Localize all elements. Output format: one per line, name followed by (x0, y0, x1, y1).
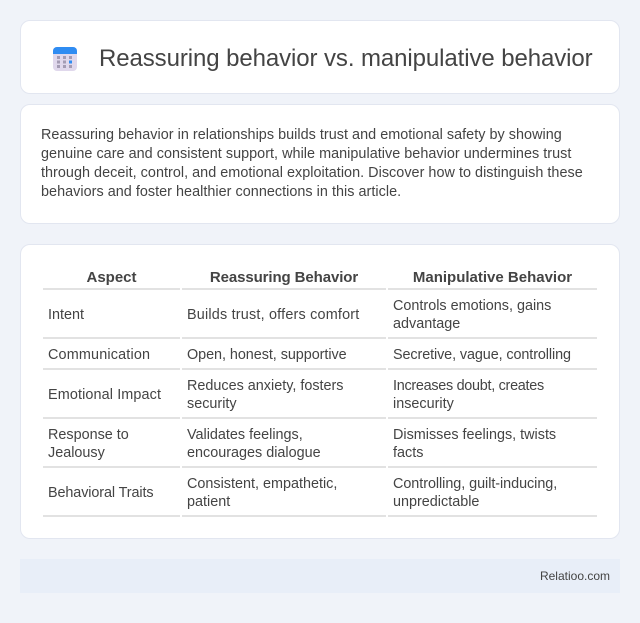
table rows: insecurity (393, 396, 454, 412)
table rows: Communication (48, 347, 150, 363)
table rows: Consistent, empathetic, (187, 476, 337, 492)
table rows: Controlling, guilt-inducing, (393, 476, 557, 492)
intro paragraph: through deceit, control, and emotional exploitation. Discover how to distinguish these (41, 165, 583, 181)
table rows: Jealousy (48, 445, 105, 461)
table rows: Increases doubt, creates (393, 378, 544, 394)
intro paragraph (41, 127, 583, 200)
table rows: Response to (48, 427, 129, 443)
table rows: Open, honest, supportive (187, 347, 347, 363)
icon: calendar (53, 47, 77, 71)
table rows: security (187, 396, 237, 412)
footer brand text: Relatioo.com (540, 569, 610, 583)
table rows: Controls emotions, gains (393, 298, 551, 314)
table header: Manipulative Behavior (413, 269, 572, 286)
panel: comparison table (20, 244, 620, 539)
intro paragraph: genuine care and consistent support, while manipulative behavior undermines trust (41, 146, 571, 162)
table header (86, 269, 572, 286)
table rows: encourages dialogue (187, 445, 321, 461)
table rows: Intent (48, 307, 84, 323)
table header: Aspect (86, 269, 137, 286)
panel: title card (20, 20, 620, 94)
table rows: Reduces anxiety, fosters (187, 378, 344, 394)
table rows: facts (393, 445, 423, 461)
footer bar (20, 559, 620, 593)
intro paragraph: behaviors and foster healthier connections in this article. (41, 184, 401, 200)
title: Reassuring behavior vs. manipulative behavior (99, 45, 593, 72)
intro paragraph: Reassuring behavior in relationships builds trust and emotional safety by showing (41, 127, 562, 143)
table rows: Validates feelings, (187, 427, 303, 443)
table rows: Builds trust, offers comfort (187, 307, 359, 323)
table rows: patient (187, 494, 230, 510)
table rows: unpredictable (393, 494, 479, 510)
table rows: Dismisses feelings, twists (393, 427, 556, 443)
table header: Reassuring Behavior (210, 269, 358, 286)
table rows: advantage (393, 316, 460, 332)
table rows: Secretive, vague, controlling (393, 347, 571, 363)
table rows: Emotional Impact (48, 387, 161, 403)
table rows (43, 288, 597, 517)
table rows: Behavioral Traits (48, 485, 153, 501)
panel: intro text (20, 104, 620, 224)
